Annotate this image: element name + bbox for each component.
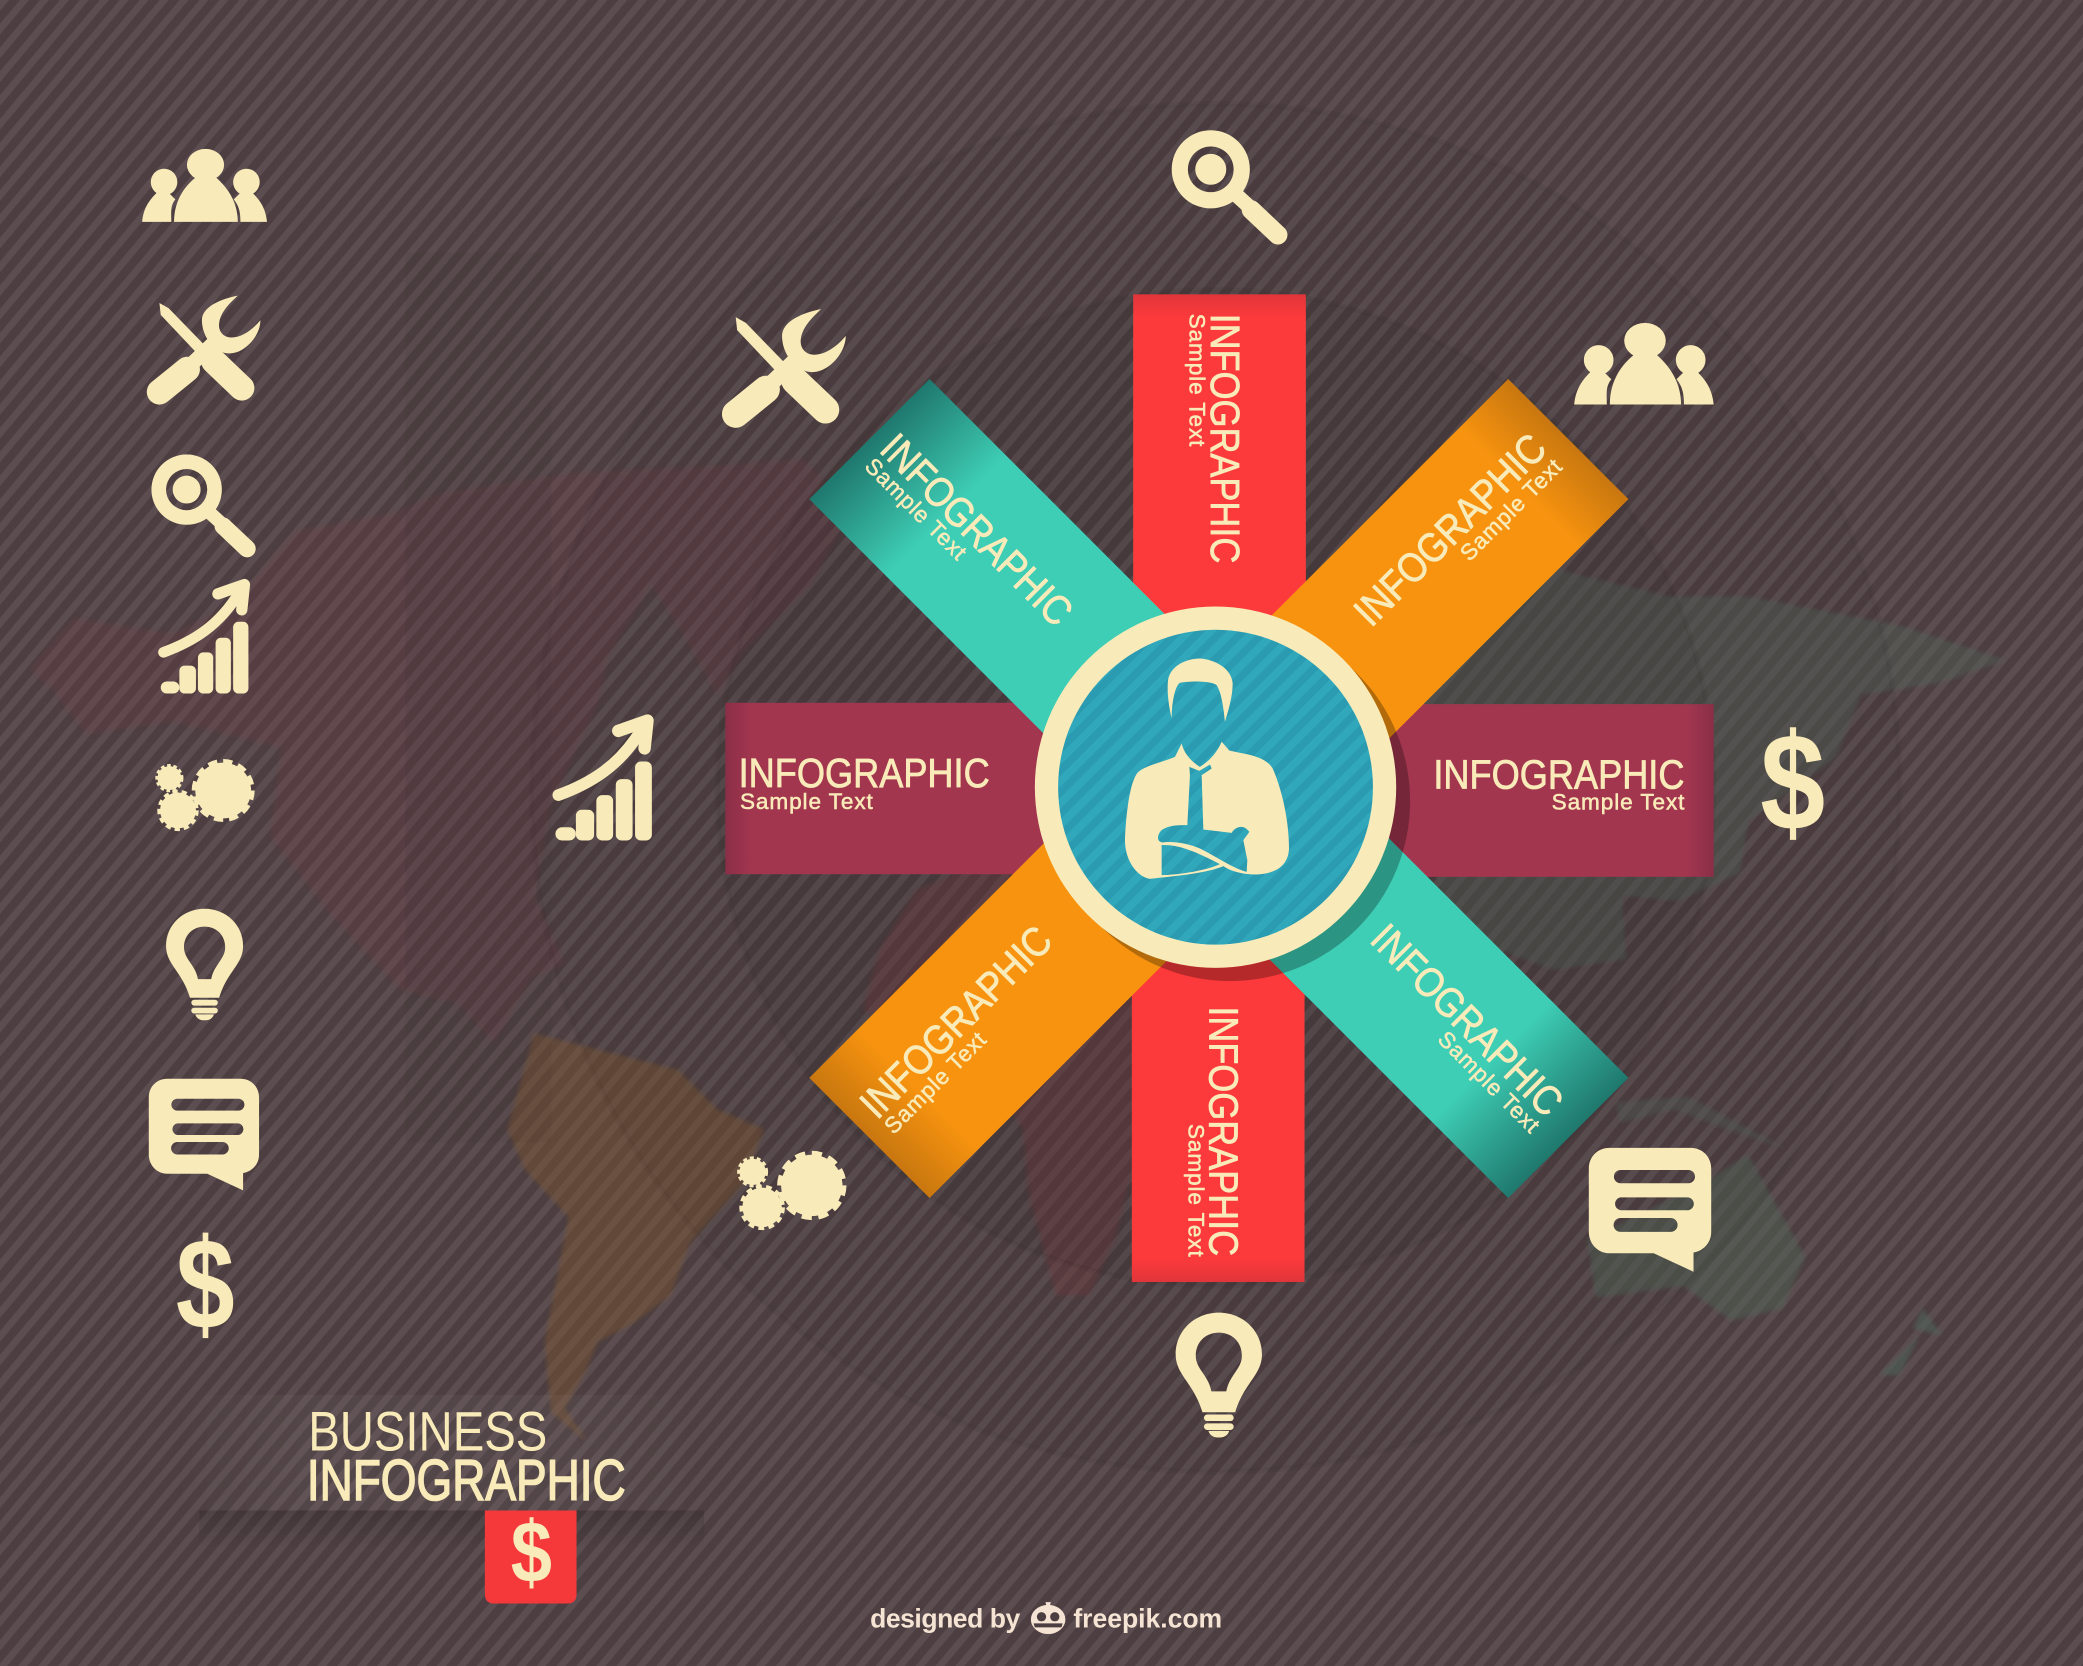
band: top red — [1133, 294, 1306, 787]
band: top red: INFOGRAPHIC — [1202, 314, 1248, 563]
icon: light bulb bottom — [1176, 1313, 1262, 1438]
label: right maroon — [1433, 751, 1685, 815]
badge blue disc — [1058, 630, 1373, 945]
radial icons — [555, 130, 1825, 1438]
icon: people top-right — [1574, 323, 1714, 404]
map: indonesia — [1615, 1096, 1787, 1149]
credit — [870, 1602, 1222, 1634]
band: top red: Sample Text — [1185, 314, 1210, 447]
badge drop shadow — [1050, 621, 1410, 981]
label: teal bottom-right: INFOGRAPHIC — [1362, 915, 1572, 1125]
icon: light bulb — [166, 909, 243, 1020]
icon: tools — [159, 296, 260, 392]
icon: dollar: $ — [176, 1213, 235, 1357]
center badge — [1035, 607, 1410, 981]
map: south america — [507, 1034, 764, 1441]
label: right maroon: Sample Text — [1552, 790, 1685, 815]
credit text: freepik.com: freepik.com — [1073, 1603, 1222, 1633]
label: orange bottom-left: Sample Text — [879, 1027, 992, 1139]
icon: dollar right: $ — [1760, 705, 1825, 860]
icon: magnifier — [151, 454, 247, 549]
label: teal top-left: Sample Text — [860, 453, 972, 565]
label: left maroon — [739, 750, 990, 814]
red dollar tag — [485, 1505, 577, 1603]
icon: gears bottom-left — [739, 1153, 844, 1228]
icon: growth chart left — [555, 721, 652, 840]
tag body — [485, 1511, 577, 1603]
icon: growth chart — [161, 585, 248, 694]
label: orange top-right: INFOGRAPHIC — [1345, 425, 1555, 635]
band: right maroon — [1315, 704, 1714, 877]
icon column — [142, 149, 267, 1357]
title line: infographic: INFOGRAPHIC — [307, 1449, 626, 1513]
icon: tools top-left — [736, 309, 846, 414]
band: teal top-left to bottom-right — [809, 379, 1628, 1198]
label: left maroon: Sample Text — [740, 789, 874, 814]
map: new zealand — [1880, 1309, 1942, 1375]
title line: business: BUSINESS — [308, 1400, 547, 1463]
map: north america and greenland — [29, 460, 850, 1043]
faint column edge — [405, 252, 551, 1143]
title — [307, 1400, 626, 1513]
label: teal bottom-right: Sample Text — [1433, 1026, 1545, 1138]
band: left maroon — [725, 703, 1124, 874]
icon: gears — [157, 761, 252, 829]
band: bottom red: INFOGRAPHIC — [1201, 1006, 1247, 1256]
label: orange bottom-left: INFOGRAPHIC — [851, 917, 1061, 1127]
world map silhouette — [29, 460, 2006, 1441]
map: australia — [1587, 1154, 1805, 1321]
icon: freepik mascot — [1031, 1602, 1065, 1634]
map: africa and europe — [863, 850, 1169, 1295]
icon: businessman — [1125, 658, 1289, 879]
title band — [173, 1395, 704, 1511]
band: bottom red: Sample Text — [1183, 1124, 1208, 1257]
title band shadow — [199, 1511, 704, 1548]
band: bottom red — [1132, 787, 1305, 1282]
label: right maroon: INFOGRAPHIC — [1433, 751, 1684, 797]
icon: people — [142, 149, 267, 222]
map: asia — [1408, 531, 2006, 970]
label: orange top-right: Sample Text — [1455, 454, 1567, 566]
outer faint circle — [531, 104, 1900, 1472]
icon: speech bubble bottom-right — [1589, 1148, 1711, 1272]
label: left maroon: INFOGRAPHIC — [739, 750, 990, 796]
icon: speech bubble — [149, 1079, 259, 1190]
tag dollar: $ — [511, 1505, 552, 1602]
credit text: designed by: designed by — [870, 1603, 1020, 1633]
inner faint circle — [717, 290, 1714, 1286]
icon: magnifier top — [1172, 130, 1278, 235]
label: teal top-left: INFOGRAPHIC — [872, 425, 1082, 635]
band: orange top-right to bottom-left — [809, 379, 1628, 1198]
badge cream ring — [1035, 607, 1396, 968]
